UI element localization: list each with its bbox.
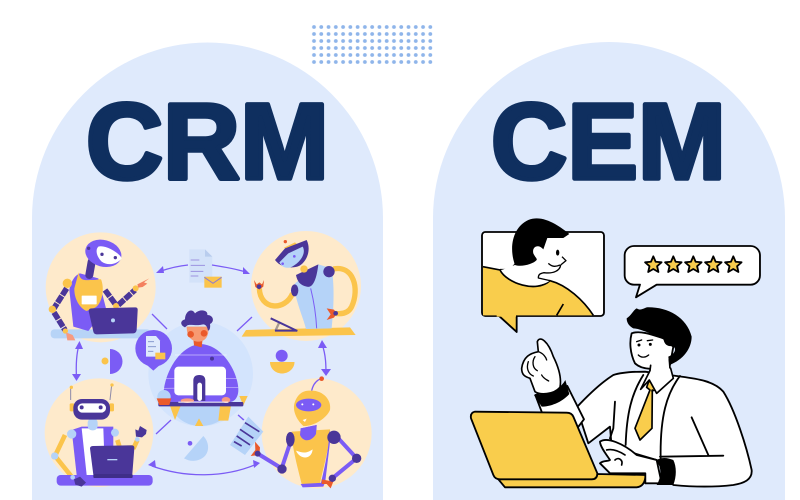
panel: CEM arch [433, 42, 785, 500]
icon: purple dot with blue wedge [184, 436, 208, 461]
heading: CEM: CEM [491, 80, 726, 202]
robot: bottom left with laptop [45, 378, 153, 487]
illustration: man at laptop pointing up [471, 307, 752, 487]
chat bubble: document and envelope [135, 330, 172, 371]
icon: purple dot with yellow bowl [270, 350, 294, 374]
arrows between robots [76, 265, 326, 475]
icon: document and envelope [189, 249, 222, 288]
arrowheads [72, 266, 331, 468]
center person at monitor [148, 310, 253, 426]
illustration: CRM robots network [45, 231, 372, 488]
dot pattern [310, 24, 434, 66]
heading: CRM: CRM [86, 80, 329, 202]
speech bubble: five star rating [625, 246, 760, 297]
icon: yellow dot with purple half circle [102, 349, 122, 374]
panel: CRM arch [32, 43, 383, 500]
robot: top right with wrenches [242, 231, 361, 341]
robot: top left with laptop [46, 232, 156, 342]
robot: bottom right with document [230, 376, 372, 488]
illustration: customer video call card [482, 218, 604, 332]
